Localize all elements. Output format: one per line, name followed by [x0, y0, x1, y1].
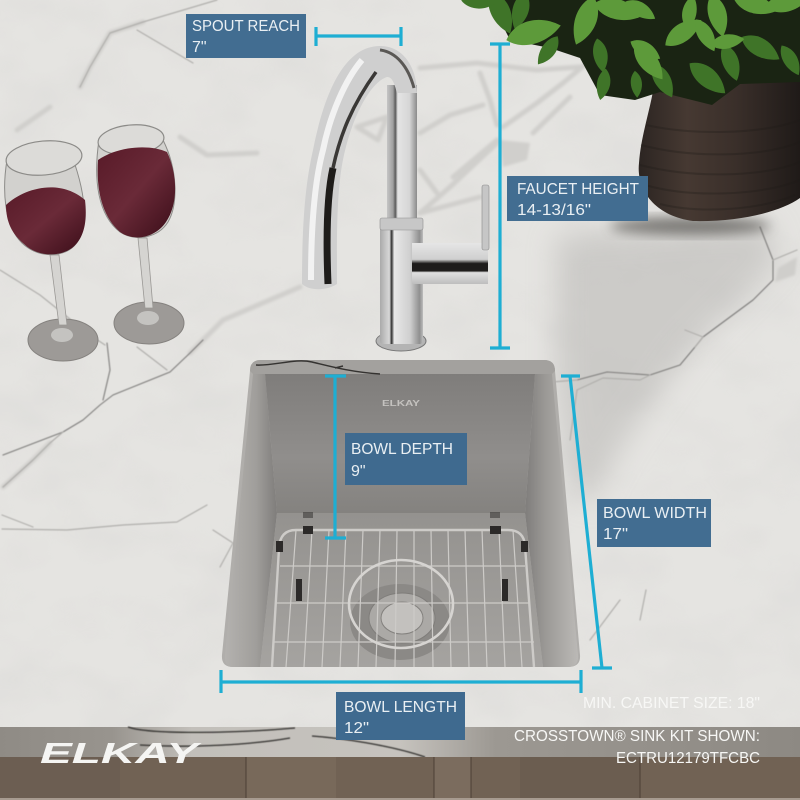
rim top edge	[250, 360, 555, 374]
sink kit note	[514, 728, 760, 767]
label: faucet height: 14-13/16"	[517, 202, 591, 219]
label: spout reach	[186, 14, 306, 58]
dimension: bowl length	[221, 670, 581, 693]
label: spout reach: 7"	[192, 39, 207, 56]
faucet collar	[380, 218, 423, 230]
left glass foot knob	[51, 328, 73, 342]
dimension: faucet height	[490, 44, 510, 348]
label: bowl length: 12"	[344, 720, 369, 737]
sink back wall	[265, 374, 535, 513]
right glass foot knob	[137, 311, 159, 325]
sink kit note: CROSSTOWN® SINK KIT SHOWN:	[514, 728, 760, 745]
sink kit note: ECTRU12179TFCBC	[616, 750, 760, 767]
right glass rim	[97, 122, 165, 158]
label: bowl depth	[345, 433, 467, 485]
label: bowl width: BOWL WIDTH	[603, 505, 707, 522]
label: bowl length	[336, 692, 465, 740]
label: bowl depth: 9"	[351, 463, 366, 480]
faucet lever	[482, 185, 489, 250]
faucet gooseneck spout	[302, 46, 417, 289]
fine marble veins	[0, 0, 797, 640]
strainer ring	[349, 560, 453, 648]
marble reflection on rim	[256, 361, 380, 374]
sink rim	[222, 360, 580, 667]
faucet riser	[387, 85, 417, 225]
pot shadow on counter	[610, 217, 770, 235]
faucet lower body	[380, 226, 423, 344]
sink floor	[260, 513, 543, 667]
dimension: spout reach	[316, 27, 401, 46]
faucet	[302, 46, 489, 351]
right glass bowl	[97, 140, 175, 237]
faucet base ring	[376, 331, 426, 351]
logo: Elkay: ELKAY	[40, 738, 202, 770]
label: bowl width	[597, 499, 711, 547]
dimension: bowl depth	[325, 376, 346, 538]
minimum cabinet size note: MIN. CABINET SIZE: 18"	[583, 695, 760, 712]
right glass base	[114, 302, 184, 344]
left glass base	[28, 319, 98, 361]
soft marble veins	[3, 22, 797, 487]
label: faucet height	[507, 176, 648, 221]
drain	[350, 584, 450, 660]
left glass rim	[5, 138, 83, 178]
left glass bowl	[5, 156, 84, 255]
wood cabinet	[0, 757, 800, 800]
label: spout reach: SPOUT REACH	[192, 18, 300, 35]
counter edge veins	[128, 727, 425, 757]
sink left wall	[225, 374, 277, 667]
sink right wall	[525, 374, 578, 667]
label: bowl length: BOWL LENGTH	[344, 699, 457, 716]
wine glass right	[97, 122, 184, 344]
wine glass left	[5, 138, 98, 361]
label: bowl width: 17"	[603, 526, 628, 543]
label: bowl depth: BOWL DEPTH	[351, 441, 453, 458]
label: faucet height: FAUCET HEIGHT	[517, 181, 639, 198]
sink bowl	[222, 360, 580, 667]
dimension: bowl width	[561, 376, 612, 668]
right glass wine	[98, 147, 175, 237]
plant pot	[639, 80, 800, 221]
right glass stem	[138, 238, 153, 308]
left glass stem	[50, 255, 67, 325]
wire rack	[272, 530, 534, 667]
faucet handle body	[412, 243, 488, 284]
plant foliage	[461, 0, 800, 105]
embossed logo: ELKAY	[382, 399, 421, 408]
counter front edge	[0, 727, 800, 758]
rack clips	[276, 512, 528, 601]
left glass wine	[6, 187, 86, 254]
